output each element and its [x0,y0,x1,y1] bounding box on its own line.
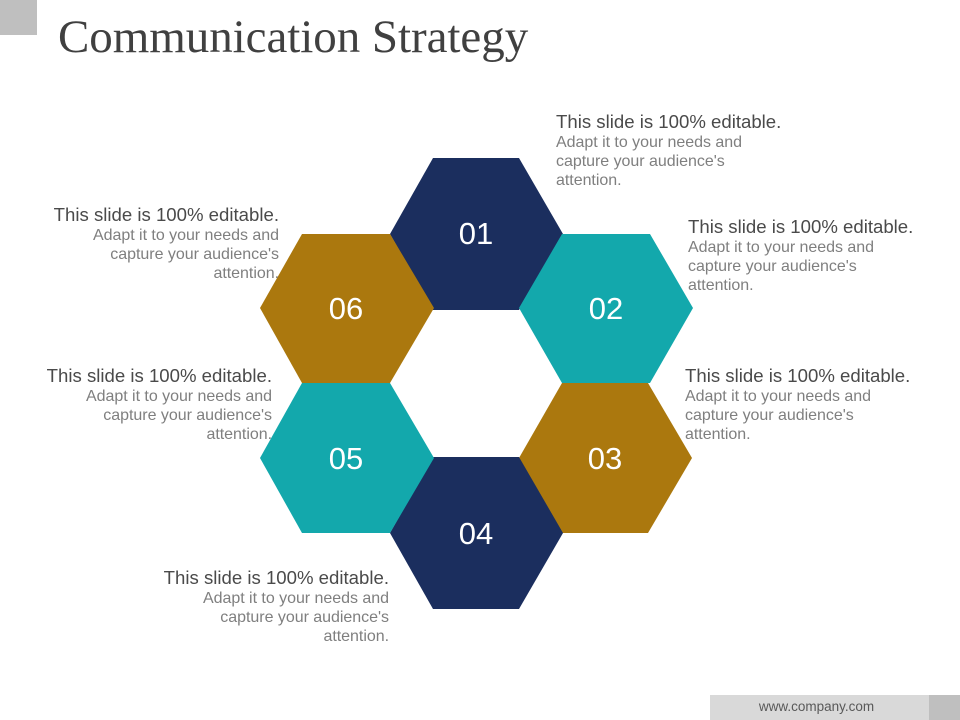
footer url: www.company.com [759,699,874,714]
text block 06: Adapt it to your needs and [93,227,279,244]
text block 05 [47,365,272,443]
text block 02: This slide is 100% editable. [688,216,913,237]
text block 01: attention. [556,172,622,189]
hexagon 04 [390,457,563,609]
hexagon 04: 04 [459,516,493,551]
text block 04 [164,567,389,645]
footer bar [710,695,960,720]
text block 04: This slide is 100% editable. [164,567,389,588]
text block 02: Adapt it to your needs and [688,239,874,256]
text block 01: Adapt it to your needs and [556,134,742,151]
hexagon 01 [390,158,563,310]
text block 01 [556,111,781,189]
text block 01: capture your audience's [556,153,725,170]
hexagon 02 [519,234,693,383]
text block 02 [688,216,913,294]
text block 06: capture your audience's [110,246,279,263]
text block 03 [685,365,910,443]
text block 03: capture your audience's [685,407,854,424]
hexagon 03: 03 [588,441,622,476]
hexagon 06: 06 [329,291,363,326]
text block 03: attention. [685,426,751,443]
title: Communication Strategy [58,11,528,63]
hexagon 01: 01 [459,216,493,251]
text block 06: This slide is 100% editable. [54,204,279,225]
text block 04: capture your audience's [220,609,389,626]
text block 02: attention. [688,277,754,294]
text block 06 [54,204,279,282]
hexagon 05 [260,383,434,533]
text block 01: This slide is 100% editable. [556,111,781,132]
text block 03: Adapt it to your needs and [685,388,871,405]
footer accent block [929,695,960,720]
text block 04: Adapt it to your needs and [203,590,389,607]
text block 05: Adapt it to your needs and [86,388,272,405]
corner accent square [0,0,37,35]
text block 05: capture your audience's [103,407,272,424]
text block 04: attention. [323,628,389,645]
hexagon 05: 05 [329,441,363,476]
hexagon 02: 02 [589,291,623,326]
text block 05: This slide is 100% editable. [47,365,272,386]
text block 06: attention. [213,265,279,282]
text block 03: This slide is 100% editable. [685,365,910,386]
text block 02: capture your audience's [688,258,857,275]
text block 05: attention. [206,426,272,443]
hexagon 06 [260,234,434,383]
hexagon 03 [519,383,692,533]
